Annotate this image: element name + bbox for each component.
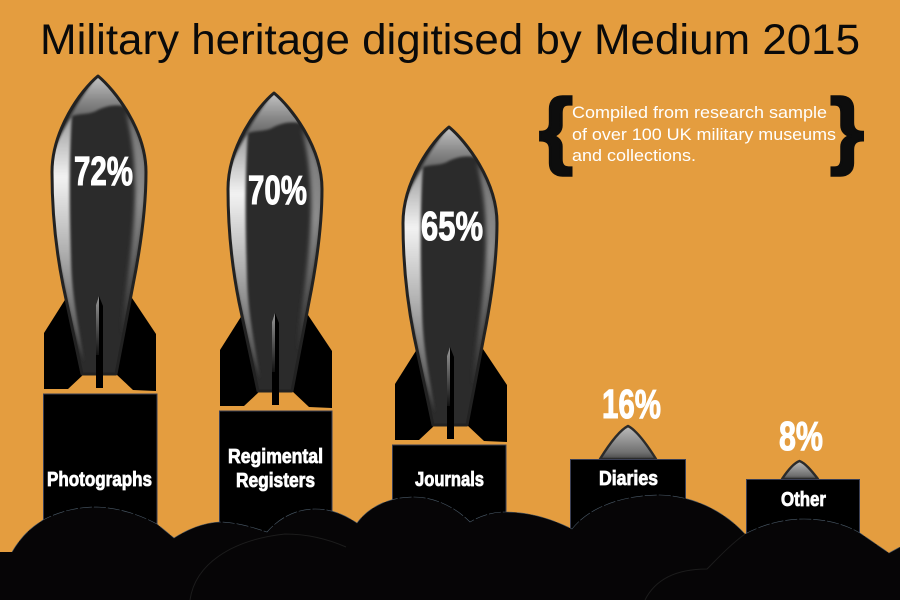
- right brace: }: [830, 82, 864, 176]
- callout: research sample note: [539, 82, 864, 176]
- smoke clouds: [0, 495, 900, 600]
- left brace: {: [539, 82, 573, 176]
- column: [570, 460, 686, 532]
- note text: of over 100 UK military museums: [572, 126, 836, 144]
- label: Journals: [415, 469, 484, 491]
- rocket icon: [395, 125, 507, 442]
- bar: Journals 65%: [392, 125, 507, 535]
- column: [44, 394, 157, 534]
- bar: Diaries 16%: [570, 381, 686, 532]
- bar: Regimental Registers 70%: [220, 91, 332, 536]
- title: Military heritage digitised by Medium 2015: [40, 16, 860, 64]
- label: Registers: [236, 470, 315, 492]
- rocket nose: [600, 426, 656, 459]
- column: [392, 445, 506, 535]
- value 65%: 65%: [421, 203, 483, 249]
- note text: [572, 104, 836, 165]
- value 72%: 72%: [74, 148, 133, 194]
- label: Photographs: [47, 469, 152, 491]
- note text: Compiled from research sample: [572, 104, 827, 122]
- column: [746, 480, 860, 540]
- bar: Photographs 72%: [44, 74, 157, 534]
- label: [228, 446, 323, 492]
- value 70%: 70%: [248, 167, 307, 213]
- column: [220, 411, 332, 536]
- bar: Other 8%: [746, 413, 860, 540]
- label: Other: [781, 489, 826, 511]
- rocket nose: [782, 461, 818, 479]
- rocket icon: [44, 74, 156, 391]
- value 16%: 16%: [602, 381, 661, 427]
- note text: and collections.: [572, 147, 696, 165]
- label: Diaries: [599, 468, 658, 490]
- rocket icon: [220, 91, 332, 408]
- label: Regimental: [228, 446, 323, 468]
- value 8%: 8%: [779, 413, 823, 459]
